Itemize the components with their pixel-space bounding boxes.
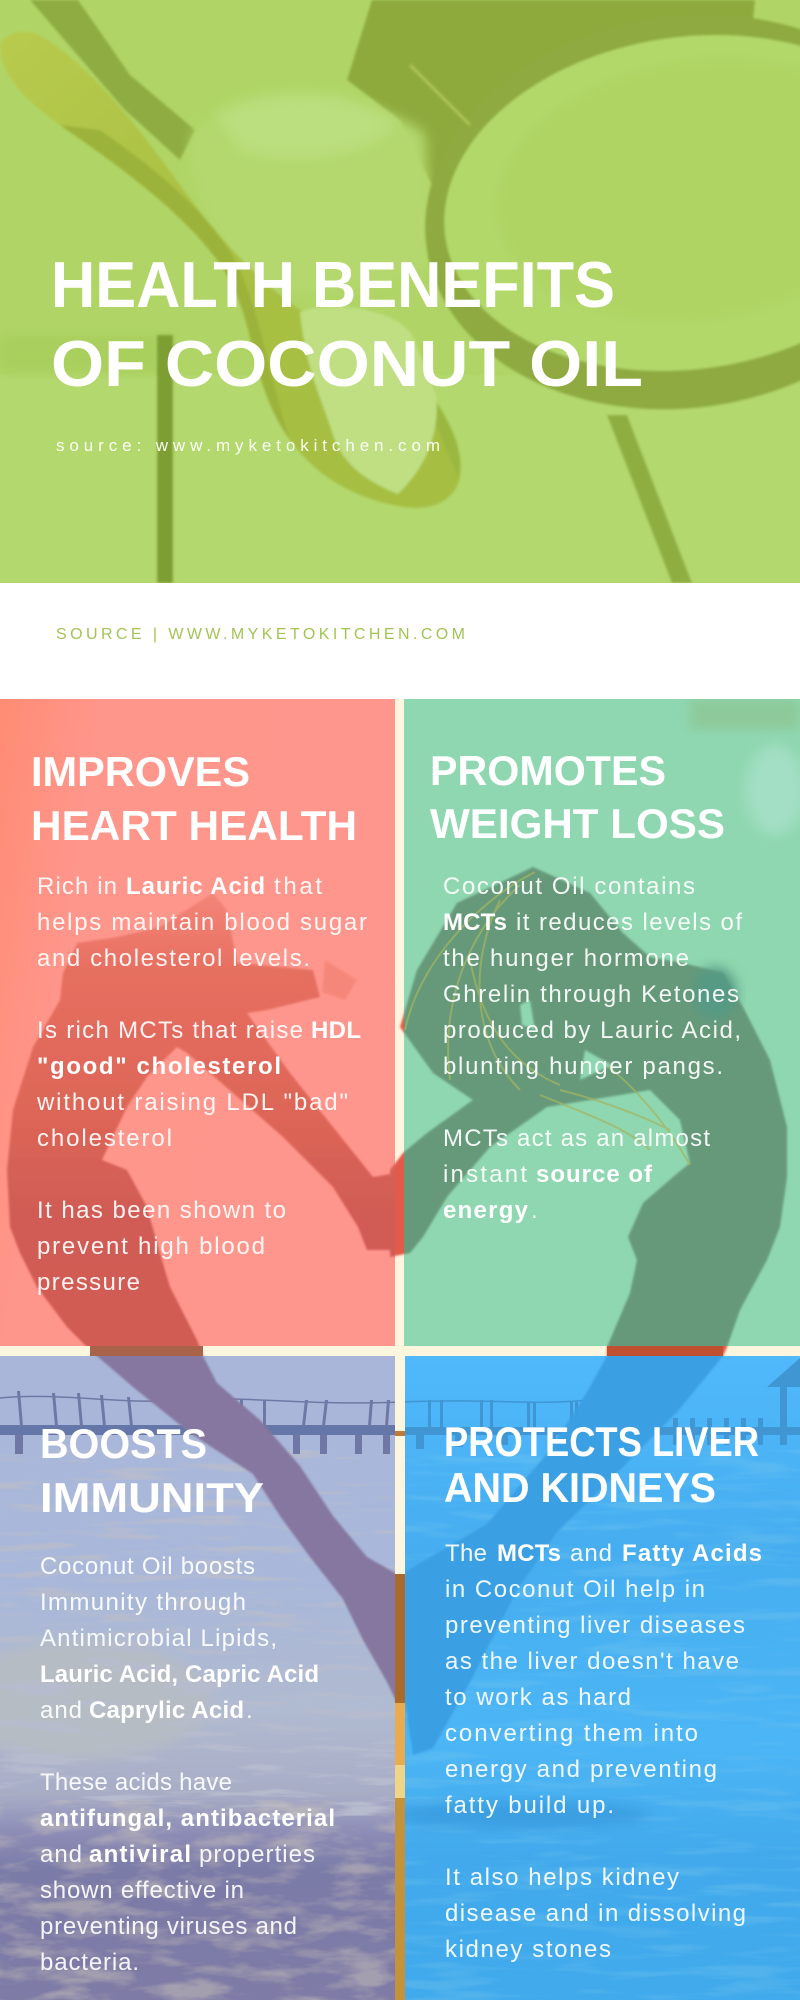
heading: BOOSTS [40, 1420, 207, 1467]
body text: it reduces levels of [516, 909, 742, 936]
heading: PROTECTS LIVER [444, 1418, 759, 1465]
body text: bacteria. [40, 1949, 139, 1976]
source strip [0, 583, 800, 699]
body text: helps maintain blood sugar [37, 909, 367, 936]
silhouette: left dancer in red [6, 894, 395, 1346]
body text: cholesterol [37, 1125, 172, 1152]
panel: boosts immunity [0, 1356, 395, 2000]
body text [443, 873, 742, 1224]
body text: preventing liver diseases [445, 1612, 745, 1639]
body text: MCTs [497, 1540, 561, 1567]
source strip: SOURCE | WWW.MYKETOKITCHEN.COM [56, 626, 465, 643]
text: promotes weight loss [430, 747, 742, 1224]
body text: Coconut Oil boosts [40, 1553, 255, 1580]
body text: and [570, 1540, 612, 1567]
body text: in Coconut Oil help in [445, 1576, 705, 1603]
body text: HDL [311, 1017, 361, 1044]
body text: fatty build up. [445, 1792, 614, 1819]
heading: HEART HEALTH [31, 802, 357, 849]
heading: IMPROVES [31, 748, 250, 795]
body text: Antimicrobial Lipids, [40, 1625, 277, 1652]
heading: WEIGHT LOSS [430, 800, 725, 847]
body text: without raising LDL "bad" [36, 1089, 348, 1116]
body text: Lauric Acid [126, 873, 265, 900]
body text: and [40, 1841, 82, 1868]
body text: and cholesterol levels. [37, 945, 310, 972]
heading: PROMOTES [430, 747, 666, 794]
cream divider with photo showing through [0, 699, 800, 2000]
body text: and [40, 1697, 82, 1724]
body text: Fatty Acids [622, 1540, 762, 1567]
hair strands [405, 872, 690, 1165]
hero photo: coconut oil and coconut [0, 0, 800, 583]
body text: disease and in dissolving [445, 1900, 746, 1927]
body text: . [531, 1197, 538, 1224]
text: boosts immunity [40, 1420, 335, 1976]
body text: "good" cholesterol [37, 1053, 281, 1080]
body text [445, 1540, 762, 1963]
text: improves heart health [31, 748, 367, 1296]
title: OF COCONUT OIL [51, 327, 643, 400]
heading [430, 747, 725, 847]
pier [0, 1391, 395, 1454]
body text: Is rich MCTs that raise [37, 1017, 303, 1044]
title: HEALTH BENEFITS [51, 248, 615, 321]
body text: converting them into [445, 1720, 698, 1747]
body text: blunting hunger pangs. [443, 1053, 723, 1080]
body text: to work as hard [445, 1684, 631, 1711]
body text: It has been shown to [37, 1197, 286, 1224]
panel: improves heart health [0, 699, 395, 1346]
body text: energy [443, 1197, 529, 1224]
body text: produced by Lauric Acid, [443, 1017, 741, 1044]
body text: MCTs act as an almost [443, 1125, 710, 1152]
body text: the hunger hormone [443, 945, 689, 972]
body text: Immunity through [40, 1589, 246, 1616]
heading [444, 1418, 759, 1511]
heading [40, 1420, 264, 1521]
heading: IMMUNITY [40, 1474, 264, 1521]
panel: promotes weight loss [404, 699, 800, 1346]
body text: . [246, 1697, 253, 1724]
body text: MCTs [443, 909, 507, 936]
source line on hero: source: www.myketokitchen.com [56, 436, 440, 455]
body text [40, 1553, 335, 1976]
body text: pressure [37, 1269, 140, 1296]
body text: instant [443, 1161, 527, 1188]
body text: properties [199, 1841, 315, 1868]
body text: energy and preventing [445, 1756, 717, 1783]
body text: prevent high blood [37, 1233, 265, 1260]
body text: Lauric Acid, Capric Acid [40, 1661, 319, 1688]
panel: protects liver and kidneys [405, 1356, 800, 2000]
body text: Rich in [37, 873, 117, 900]
silhouette: right dancer in green [404, 866, 788, 1346]
silhouette: leg [405, 1356, 724, 1755]
heading [31, 748, 357, 849]
pier [405, 1358, 800, 1449]
body text: shown effective in [40, 1877, 244, 1904]
body text: These acids have [40, 1769, 232, 1796]
body text: as the liver doesn't have [445, 1648, 739, 1675]
body text: source of [536, 1161, 653, 1188]
body text: The [445, 1540, 487, 1567]
body text [36, 873, 367, 1296]
body text: Ghrelin through Ketones [443, 981, 739, 1008]
silhouette: leg [96, 1356, 395, 1701]
body text: antifungal, antibacterial [40, 1805, 335, 1832]
body text: Coconut Oil contains [443, 873, 695, 900]
body text: that [274, 873, 322, 900]
body text: kidney stones [445, 1936, 611, 1963]
body text: preventing viruses and [40, 1913, 297, 1940]
body text: antiviral [89, 1841, 191, 1868]
heading: AND KIDNEYS [444, 1464, 716, 1511]
title [51, 248, 643, 400]
body text: Caprylic Acid [89, 1697, 244, 1724]
body text: It also helps kidney [445, 1864, 679, 1891]
text: protects liver and kidneys [444, 1418, 762, 1963]
